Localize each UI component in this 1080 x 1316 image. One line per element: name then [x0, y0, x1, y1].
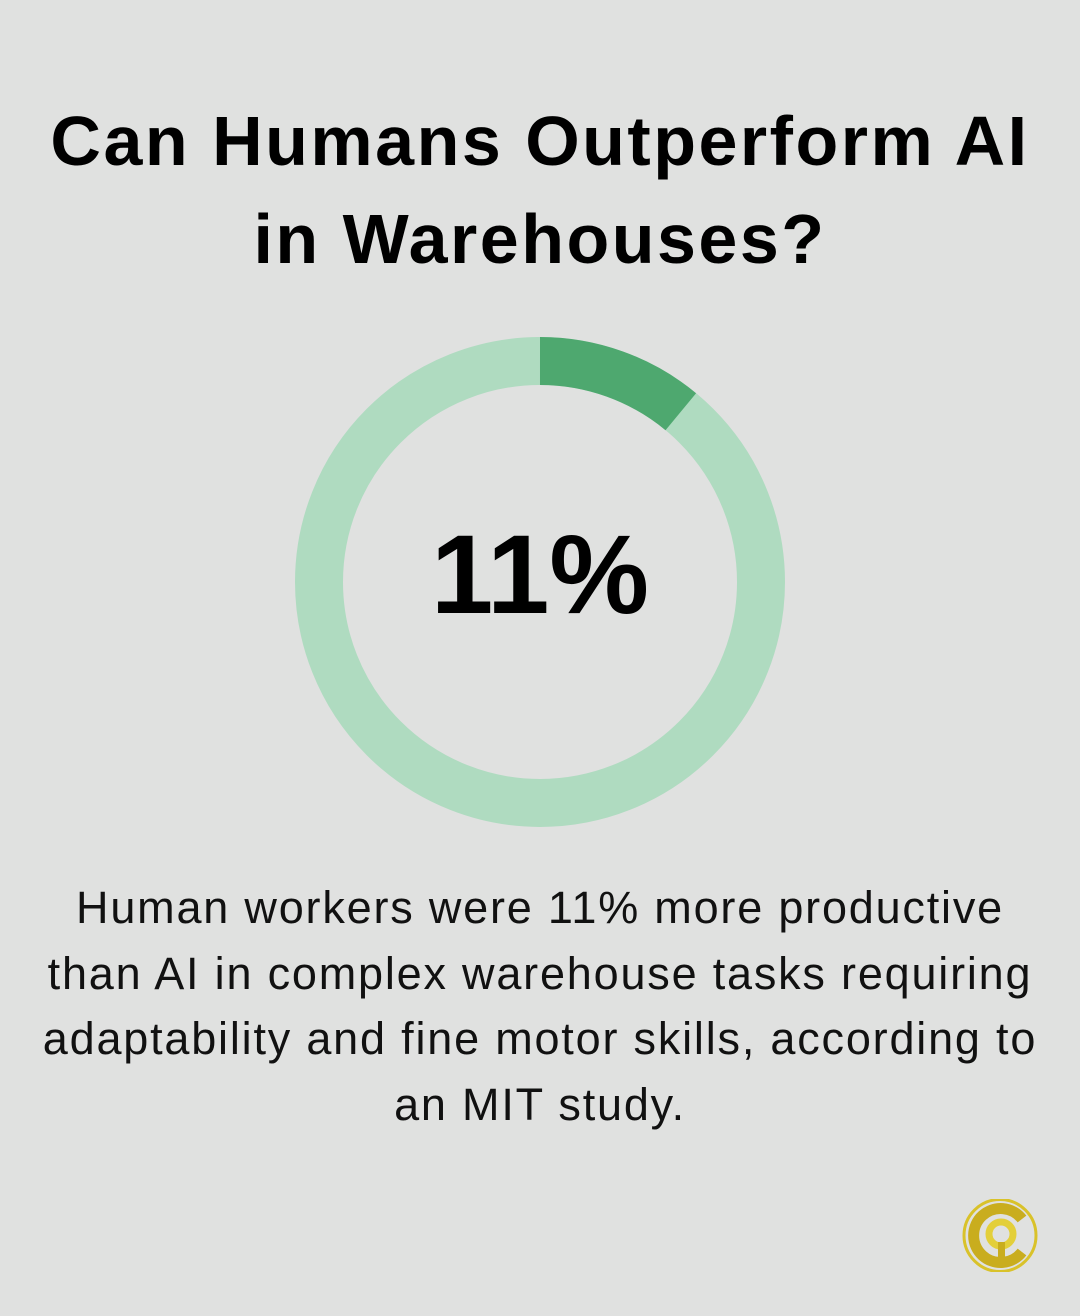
title: [50, 102, 1030, 278]
description text: an MIT study.: [394, 1078, 686, 1130]
icon: logo: [962, 1199, 1038, 1272]
title: Can Humans Outperform AI: [50, 102, 1030, 180]
description text: [43, 882, 1037, 1130]
description text: adaptability and fine motor skills, according to: [43, 1013, 1037, 1064]
description text: than AI in complex warehouse tasks requiring: [48, 948, 1032, 998]
description text: Human workers were 11% more productive: [76, 882, 1004, 933]
title: in Warehouses?: [253, 200, 827, 278]
donut chart: 11%: [431, 512, 649, 637]
